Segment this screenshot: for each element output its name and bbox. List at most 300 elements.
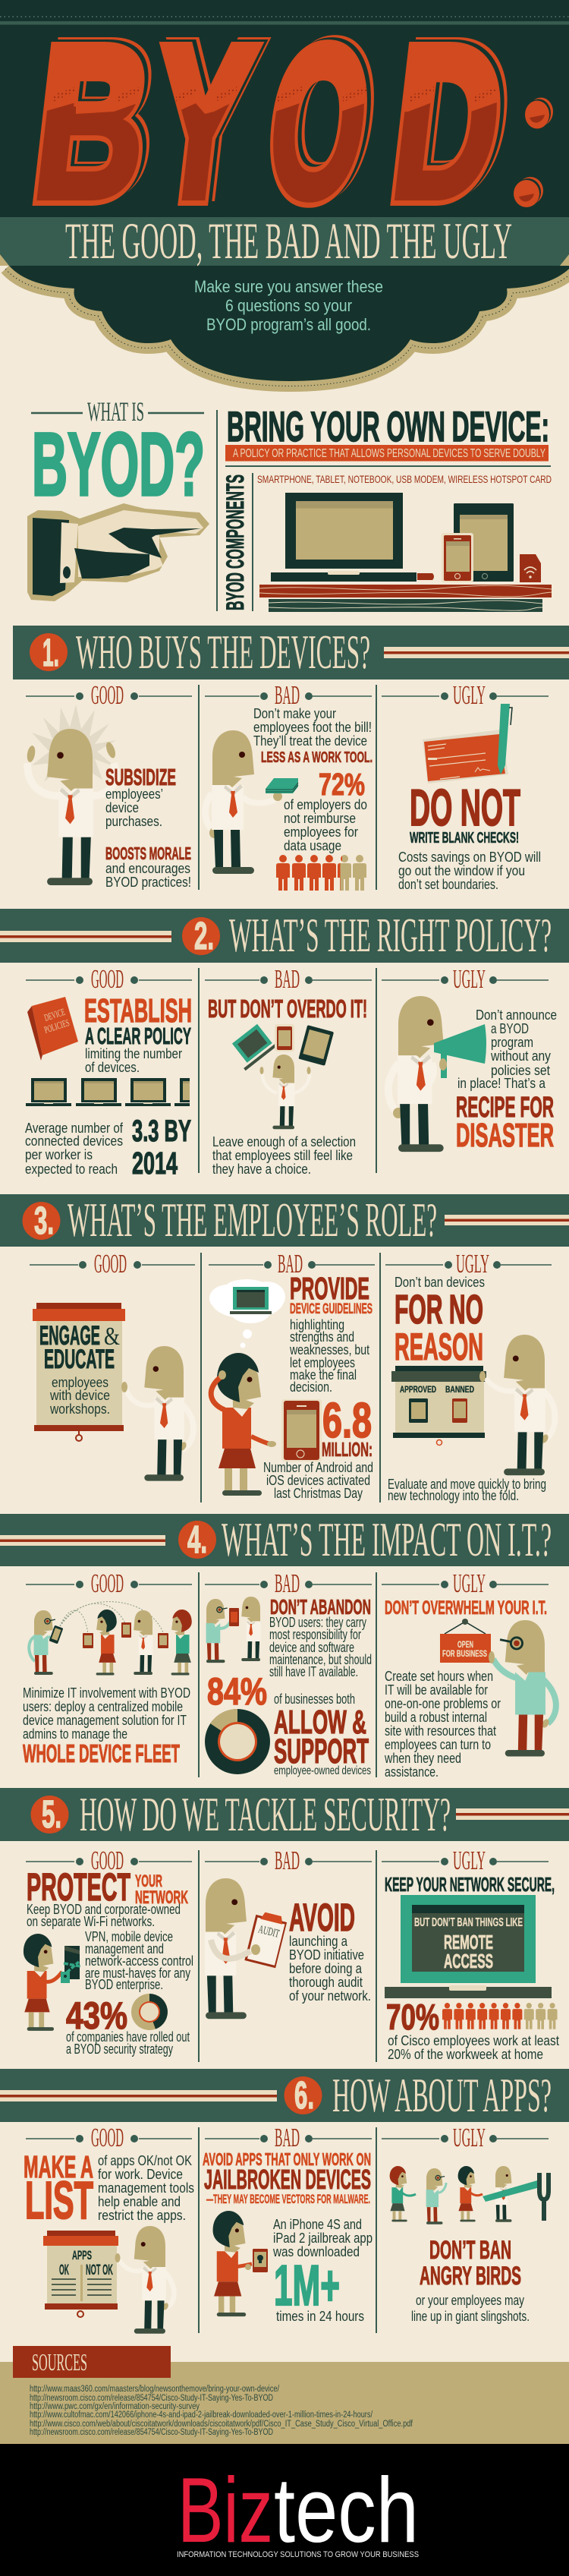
- description: [384, 1669, 501, 1780]
- description: was downloaded: [272, 2244, 360, 2259]
- label: ugly: [382, 2123, 549, 2152]
- icon: usb modem: [417, 573, 434, 580]
- stat description: not reimburse: [284, 811, 356, 826]
- label: bad: [205, 1846, 372, 1875]
- label: good: GOOD: [91, 2123, 124, 2152]
- approved and banned board: APPROVED: [400, 1386, 436, 1395]
- stat text: of businesses both: [274, 1692, 355, 1707]
- heading: allow and support: ALLOW &: [274, 1704, 366, 1741]
- label: bad: [205, 680, 372, 710]
- sources list: http://newsroom.cisco.com/release/854754/Cisco-Study-IT-Saying-Yes-To-BYOD: [30, 2428, 273, 2437]
- icon: phone with skull: [253, 2249, 268, 2272]
- stat: 3.3 by 2014: 3.3 BY: [132, 1115, 191, 1148]
- stat caption: times in 24 hours: [276, 2309, 364, 2324]
- description: [27, 1902, 181, 1929]
- heading: for no reason: REASON: [395, 1326, 483, 1368]
- icon: open for business sign: [440, 1619, 491, 1663]
- panel: section 4 good: [23, 1569, 192, 1767]
- heading: establish: ESTABLISH: [84, 992, 192, 1029]
- icons: laptops row: [26, 1078, 190, 1106]
- title: BYOD: Y: [143, 4, 262, 243]
- stat description: data usage: [284, 838, 341, 853]
- footer: Biztech logo: INFORMATION TECHNOLOGY SOLUTIONS TO GROW YOUR BUSINESS: [177, 2550, 419, 2559]
- description: don’t set boundaries.: [398, 877, 498, 892]
- intro text: BYOD program’s all good.: [206, 315, 371, 334]
- panel: section 1 ugly: [382, 680, 549, 892]
- label: ugly: UGLY: [456, 1249, 489, 1279]
- title: BYOD: B: [24, 4, 161, 243]
- label: good: [26, 2123, 192, 2152]
- title: BYOD: [32, 35, 508, 208]
- icon: notebook: [271, 493, 417, 582]
- callout text: [253, 706, 373, 766]
- stat text: expected to reach: [25, 1162, 118, 1177]
- subheading: device guidelines: DEVICE GUIDELINES: [290, 1301, 373, 1317]
- title: BYOD: D: [388, 0, 520, 238]
- stat: 6.8 million: 6.8: [322, 1392, 372, 1448]
- description: [23, 1685, 190, 1742]
- stat description: 20% of the workweek at home: [388, 2047, 543, 2062]
- label: ugly: UGLY: [453, 1569, 486, 1598]
- stat text: per worker is: [25, 1147, 93, 1162]
- heading: avoid: AVOID: [289, 1896, 355, 1939]
- label: bad: BAD: [275, 680, 300, 710]
- title: BYOD: B: [30, 0, 168, 238]
- title: BYOD: Y: [146, 2, 266, 241]
- panel: section 1 bad: [205, 680, 373, 891]
- title: BYOD: D: [382, 4, 514, 243]
- heading: don't ban angry birds: DON’T BAN: [429, 2236, 511, 2265]
- title: BYOD: O: [264, 0, 387, 238]
- description: device management solution for IT: [23, 1713, 187, 1728]
- description: are must-haves for any: [85, 1966, 190, 1981]
- label: ugly: [382, 964, 549, 994]
- description: BYOD users: they carry: [269, 1615, 366, 1630]
- description: or your employees may: [416, 2293, 524, 2308]
- sources heading: [13, 2346, 171, 2378]
- section 2 banner: 2.: [194, 914, 214, 957]
- description: strengths and: [290, 1329, 354, 1345]
- section 6 banner: 6.: [294, 2073, 314, 2117]
- icon: blank check with pen: [423, 704, 512, 784]
- label: ugly: UGLY: [453, 680, 486, 710]
- title: BYOD: O: [257, 4, 380, 243]
- intro text: Make sure you answer these: [194, 277, 383, 296]
- banner scroll: EDUCATE: [44, 1345, 115, 1374]
- description: [272, 2217, 373, 2259]
- label: ugly: [382, 1569, 549, 1598]
- intro: Don’t ban devices: [395, 1275, 485, 1290]
- title: BYOD: O: [257, 4, 380, 243]
- icon: phone: [275, 1024, 294, 1052]
- donut chart: 43 percent: [131, 1994, 168, 2030]
- description: build a robust internal: [385, 1710, 487, 1725]
- apps list board: NOT OK: [86, 2262, 113, 2278]
- label: ugly: UGLY: [453, 964, 486, 994]
- stat text: connected devices: [25, 1134, 123, 1149]
- description: [289, 1934, 371, 2004]
- subsidize text: device: [105, 800, 139, 815]
- heading: allow and support: [274, 1704, 369, 1770]
- description: [98, 2153, 194, 2223]
- icon: device policies book: DEVICE: [42, 1006, 67, 1023]
- panel: section 4 bad: [205, 1569, 372, 1777]
- description: Costs savings on BYOD will: [398, 850, 541, 865]
- heading: allow and support: SUPPORT: [274, 1732, 369, 1770]
- stat: 43%: 43%: [66, 1994, 127, 2037]
- label: ugly: [382, 1846, 549, 1875]
- label: bad: [205, 1569, 372, 1598]
- laptop with remote access message: REMOTE: [444, 1931, 493, 1953]
- stat: 6.8 million: [322, 1392, 373, 1461]
- callout text: policies set: [491, 1063, 550, 1078]
- description: Minimize IT involvement with BYOD: [23, 1685, 190, 1701]
- description: help enable and: [98, 2194, 181, 2209]
- panel: section 6 good: [24, 2123, 194, 2334]
- banner scroll: with device: [49, 1388, 110, 1403]
- description: [388, 1477, 546, 1503]
- apps list board: [43, 2231, 118, 2317]
- heading: don't ban angry birds: [420, 2236, 521, 2291]
- description: device and software: [269, 1640, 354, 1655]
- figure: man holding money: [205, 730, 282, 874]
- banner scroll: &: [104, 1323, 120, 1351]
- description: BYOD initiative: [289, 1947, 364, 1963]
- heading: avoid apps: JAILBROKEN DEVICES: [204, 2164, 371, 2195]
- figure: presenting man: [479, 1335, 555, 1475]
- description: launching a: [289, 1934, 348, 1949]
- laptop with remote access message: ACCESS: [444, 1950, 493, 1972]
- stat description: of employers do: [284, 797, 367, 812]
- description: they have a choice.: [212, 1162, 311, 1177]
- stat: 72%: 72%: [319, 767, 365, 802]
- description: site with resources that: [385, 1723, 496, 1739]
- description: highlighting: [290, 1317, 344, 1332]
- pictogram: people 70 percent: [442, 2003, 558, 2029]
- description: [85, 1046, 182, 1075]
- intro text: [194, 277, 383, 334]
- label: bad: BAD: [278, 1249, 303, 1279]
- callout text: without any: [490, 1048, 551, 1064]
- footer: Biztech logo: [0, 2444, 569, 2576]
- description: [411, 2293, 530, 2324]
- heading: protect your network: NETWORK: [135, 1887, 188, 1908]
- subsidize text: SUBSIDIZE: [105, 764, 176, 790]
- approved and banned board: [391, 1366, 486, 1446]
- panel: section 1 good: [26, 680, 192, 890]
- description: restrict the apps.: [98, 2208, 186, 2223]
- icon: device policies book: [27, 997, 78, 1061]
- stat description: employees for: [284, 825, 358, 840]
- description: of apps OK/not OK: [98, 2153, 192, 2168]
- heading: provide: PROVIDE: [290, 1271, 369, 1306]
- panel: section 6 ugly: [382, 2123, 549, 2324]
- sources list: http://newsroom.cisco.com/release/854754/Cisco-Study-IT-Saying-Yes-To-BYOD: [30, 2394, 273, 2403]
- laptop with remote access message: [385, 1895, 552, 1998]
- description: still have IT available.: [269, 1664, 358, 1679]
- description: when they need: [384, 1751, 461, 1766]
- icon: tablet: [298, 1025, 334, 1066]
- stat: 6.8 million: MILLION:: [322, 1438, 373, 1461]
- callout text: in place! That’s a: [457, 1076, 546, 1091]
- label: good: GOOD: [91, 680, 124, 710]
- donut chart: 84 percent: [205, 1709, 270, 1774]
- apps list board: APPS: [72, 2248, 92, 2262]
- icon: smartphone: [442, 533, 473, 582]
- description: maintenance, but should: [269, 1652, 372, 1667]
- label: bad: BAD: [275, 1846, 300, 1875]
- icon: tablet: [454, 503, 514, 582]
- section 3 banner: 3.: [34, 1199, 54, 1242]
- description: IT will be available for: [385, 1682, 488, 1698]
- sources list: http://www.pwc.com/gx/en/information-security-survey: [30, 2402, 200, 2411]
- figure: presenting man: [115, 2226, 174, 2334]
- icon: tilted laptop: [228, 1020, 280, 1070]
- description: decision.: [290, 1379, 332, 1395]
- section 6 banner: [0, 2068, 569, 2122]
- stat: 1M+: 1M+: [274, 2253, 340, 2317]
- description: weaknesses, but: [289, 1342, 369, 1357]
- panel: section 3 good: [30, 1249, 195, 1481]
- caption: employee-owned devices: [274, 1764, 371, 1777]
- pictogram: people 72 percent: [276, 855, 366, 891]
- panel: section 5 bad: [205, 1846, 372, 2019]
- boosts morale text: BOOSTS MORALE: [105, 843, 191, 863]
- label: ugly: [382, 680, 549, 710]
- figure: man with raised arms: [26, 729, 117, 885]
- title: colon: [514, 97, 553, 207]
- description: most responsibility for: [269, 1627, 361, 1642]
- heading: make a list: [24, 2149, 93, 2230]
- boosts morale text: BYOD practices!: [105, 875, 191, 890]
- title: BYOD: O: [261, 2, 384, 241]
- stat: 70%: 70%: [386, 1997, 439, 2037]
- icon: pointing hand: [27, 503, 209, 601]
- description: BYOD enterprise.: [85, 1977, 163, 1992]
- description: employees can turn to: [385, 1737, 491, 1752]
- description: An iPhone 4S and: [273, 2217, 362, 2232]
- description: make the final: [290, 1367, 357, 1383]
- callout text: employees foot the bill!: [253, 720, 372, 735]
- title: BYOD: D: [385, 2, 517, 241]
- description: [398, 850, 541, 892]
- title: BYOD: B: [27, 2, 165, 241]
- footer: Biztech logo: tech: [274, 2458, 419, 2562]
- description: assistance.: [385, 1764, 439, 1780]
- label: bad: BAD: [275, 1569, 300, 1598]
- label: good: GOOD: [91, 1846, 124, 1875]
- figure: presenting man: [121, 1346, 193, 1481]
- label: good: GOOD: [91, 964, 124, 994]
- panel: section 2 bad: [205, 964, 372, 1177]
- scalloped header base: [9, 266, 569, 381]
- figure: small man: [259, 1055, 311, 1129]
- stat description: a BYOD security strategy: [66, 2042, 173, 2057]
- description: of your network.: [289, 1988, 371, 2004]
- section 4 banner: 4.: [187, 1518, 207, 1561]
- label: bad: [205, 2123, 372, 2152]
- heading: protect your network: PROTECT: [27, 1865, 130, 1909]
- subsidize text: employees’: [105, 787, 163, 802]
- panel: section 5 good: [24, 1846, 193, 2057]
- title: BYOD: Y: [143, 4, 262, 243]
- title: BYOD: Y: [149, 0, 269, 238]
- section 1 banner: 1.: [42, 631, 59, 674]
- description: users: deploy a centralized mobile: [23, 1699, 183, 1714]
- subsidize text: purchases.: [105, 814, 162, 829]
- figure: woman with jailbroken phone: [213, 2211, 252, 2316]
- label: good: GOOD: [91, 1569, 124, 1598]
- panel: section 3 bad: [209, 1249, 375, 1501]
- callout text: [457, 1007, 557, 1091]
- section 5 banner: 5.: [42, 1792, 61, 1836]
- stat: 84%: 84%: [207, 1670, 267, 1713]
- callout text: Don’t make your: [253, 706, 336, 721]
- heading: make a list: LIST: [25, 2171, 93, 2230]
- description: iPad 2 jailbreak app: [273, 2231, 373, 2246]
- title: BYOD: B: [24, 4, 161, 243]
- heading: BYOD components: BYOD COMPONENTS: [222, 475, 249, 610]
- heading: for no reason: FOR NO: [395, 1287, 483, 1332]
- description: for work. Device: [98, 2167, 183, 2182]
- header panel: [0, 0, 569, 217]
- panel: section 6 bad: [203, 2123, 373, 2324]
- panel: sources: [0, 2346, 569, 2444]
- heading: avoid apps: [203, 2149, 371, 2206]
- figure: man with audit clipboard: [205, 1878, 288, 2019]
- description: line up in giant slingshots.: [411, 2309, 530, 2324]
- description: new technology into the fold.: [388, 1488, 519, 1503]
- figure: woman thinking: [211, 1353, 276, 1496]
- approved and banned board: BANNED: [445, 1386, 474, 1395]
- label: bad: [209, 1249, 375, 1279]
- description: thorough audit: [289, 1975, 363, 1990]
- callout text: program: [491, 1035, 533, 1050]
- heading: for no reason: [395, 1287, 483, 1368]
- icon: open for business sign: FOR BUSINESS: [442, 1648, 487, 1659]
- panel: section 5 ugly: [382, 1846, 559, 2062]
- description: Create set hours when: [385, 1669, 493, 1684]
- description: [269, 1615, 372, 1679]
- figure: woman with locked router: [24, 1934, 80, 2031]
- stat description: [284, 797, 367, 853]
- description: network-access control: [85, 1953, 193, 1969]
- label: ugly: [385, 1249, 552, 1279]
- description: of devices.: [85, 1060, 140, 1075]
- description: [212, 1134, 356, 1177]
- sources list: http://www.cisco.com/web/about/ciscoitatwork/downloads/ciscoitatwork/pdf/Cisco_IT_Case_Study_Cisco_Virtual_Office.pdf: [30, 2420, 413, 2429]
- description: let employees: [290, 1355, 355, 1370]
- stat description: iOS devices activated: [266, 1473, 370, 1488]
- callout text: Don’t announce: [476, 1007, 557, 1023]
- section 4 banner: [0, 1512, 569, 1566]
- subsidize text: [105, 764, 176, 829]
- description: go out the window if you: [398, 863, 525, 878]
- stat description: last Christmas Day: [274, 1486, 363, 1501]
- footer: Biztech logo: Biz: [178, 2458, 273, 2562]
- label: bad: BAD: [275, 2123, 300, 2152]
- description: [85, 1929, 193, 1992]
- sources list: http://www.cultofmac.com/142066/iphone-4s-and-ipad-2-jailbreak-downloaded-over-1-million-times-in-24-hours/: [30, 2410, 373, 2420]
- label: good: [26, 1569, 192, 1598]
- heading: what is: WHAT IS: [87, 396, 144, 427]
- icon: phone: [281, 1399, 322, 1461]
- panel: what is BYOD: [27, 396, 552, 612]
- icon: wireless hotspot card: [520, 554, 541, 582]
- illustration: two employees: [206, 1597, 260, 1663]
- description: management and: [85, 1941, 164, 1956]
- banner scroll: workshops.: [49, 1402, 110, 1417]
- description: Keep BYOD and corporate-owned: [27, 1902, 181, 1917]
- callout text: LESS AS A WORK TOOL.: [261, 749, 373, 766]
- banner scroll: employees: [52, 1375, 108, 1390]
- label: good: [26, 1846, 192, 1875]
- intro text: 6 questions so your: [225, 296, 352, 315]
- banner scroll: [33, 1303, 125, 1441]
- label: good: GOOD: [94, 1249, 127, 1279]
- icon: device policies book: POLICIES: [42, 1017, 71, 1036]
- label: ugly: UGLY: [453, 2123, 486, 2152]
- stat description: [263, 1460, 373, 1501]
- boosts morale text: [105, 843, 191, 890]
- description: [289, 1317, 369, 1395]
- description: on separate Wi-Fi networks.: [27, 1914, 155, 1929]
- sources heading: SOURCES: [32, 2348, 87, 2376]
- stat: 3.3 by 2014: [132, 1115, 191, 1181]
- icon: money stack: [266, 778, 298, 793]
- icon: open for business sign: OPEN: [457, 1639, 473, 1650]
- figure: man with audit clipboard: AUDIT: [257, 1924, 281, 1941]
- sources list: http://www.maas360.com/maasters/blog/newsonthemove/bring-your-own-device/: [30, 2385, 280, 2394]
- description: VPN, mobile device: [85, 1929, 173, 1944]
- description: that employees still feel like: [212, 1148, 353, 1163]
- stat description: Number of Android and: [263, 1460, 373, 1475]
- description: admins to manage the: [23, 1726, 127, 1742]
- label: good: [30, 1249, 195, 1279]
- heading: avoid apps: AVOID APPS THAT ONLY WORK ON: [203, 2149, 371, 2169]
- description: before doing a: [289, 1961, 363, 1976]
- figure: it man with glasses: [489, 1620, 556, 1757]
- heading: avoid apps: —THEY MAY BECOME VECTORS FOR MALWARE.: [206, 2192, 370, 2206]
- panel: section 2 ugly: [382, 964, 557, 1154]
- apps list board: OK: [59, 2262, 69, 2278]
- stat text: [25, 1121, 124, 1177]
- label: bad: [205, 964, 372, 994]
- label: good: [26, 680, 192, 710]
- stat: 3.3 by 2014: 2014: [132, 1146, 178, 1181]
- title: BYOD: D: [382, 4, 514, 243]
- heading: make a list: MAKE A: [24, 2149, 93, 2184]
- panel: section 4 ugly: [382, 1569, 556, 1780]
- heading: BYOD?: BYOD?: [32, 415, 205, 515]
- description: management tools: [98, 2180, 194, 2196]
- heading: whole device fleet: WHOLE DEVICE FLEET: [23, 1739, 180, 1767]
- description: limiting the number: [85, 1046, 182, 1061]
- label: good: [26, 964, 192, 994]
- label: bad: BAD: [275, 964, 300, 994]
- panel: section 3 ugly: [385, 1249, 555, 1503]
- description: one-on-one problems or: [385, 1696, 501, 1711]
- heading: recipe for disaster: [456, 1092, 554, 1154]
- illustration: employees in line at a slingshot: [390, 2166, 549, 2224]
- illustration: four people sharing devices: [29, 1602, 192, 1675]
- description: Leave enough of a selection: [212, 1134, 356, 1149]
- label: ugly: UGLY: [453, 1846, 486, 1875]
- starburst: [32, 705, 116, 782]
- callout text: They’ll treat the device: [253, 733, 367, 749]
- callout text: a BYOD: [491, 1021, 529, 1036]
- section 2 banner: [0, 908, 569, 963]
